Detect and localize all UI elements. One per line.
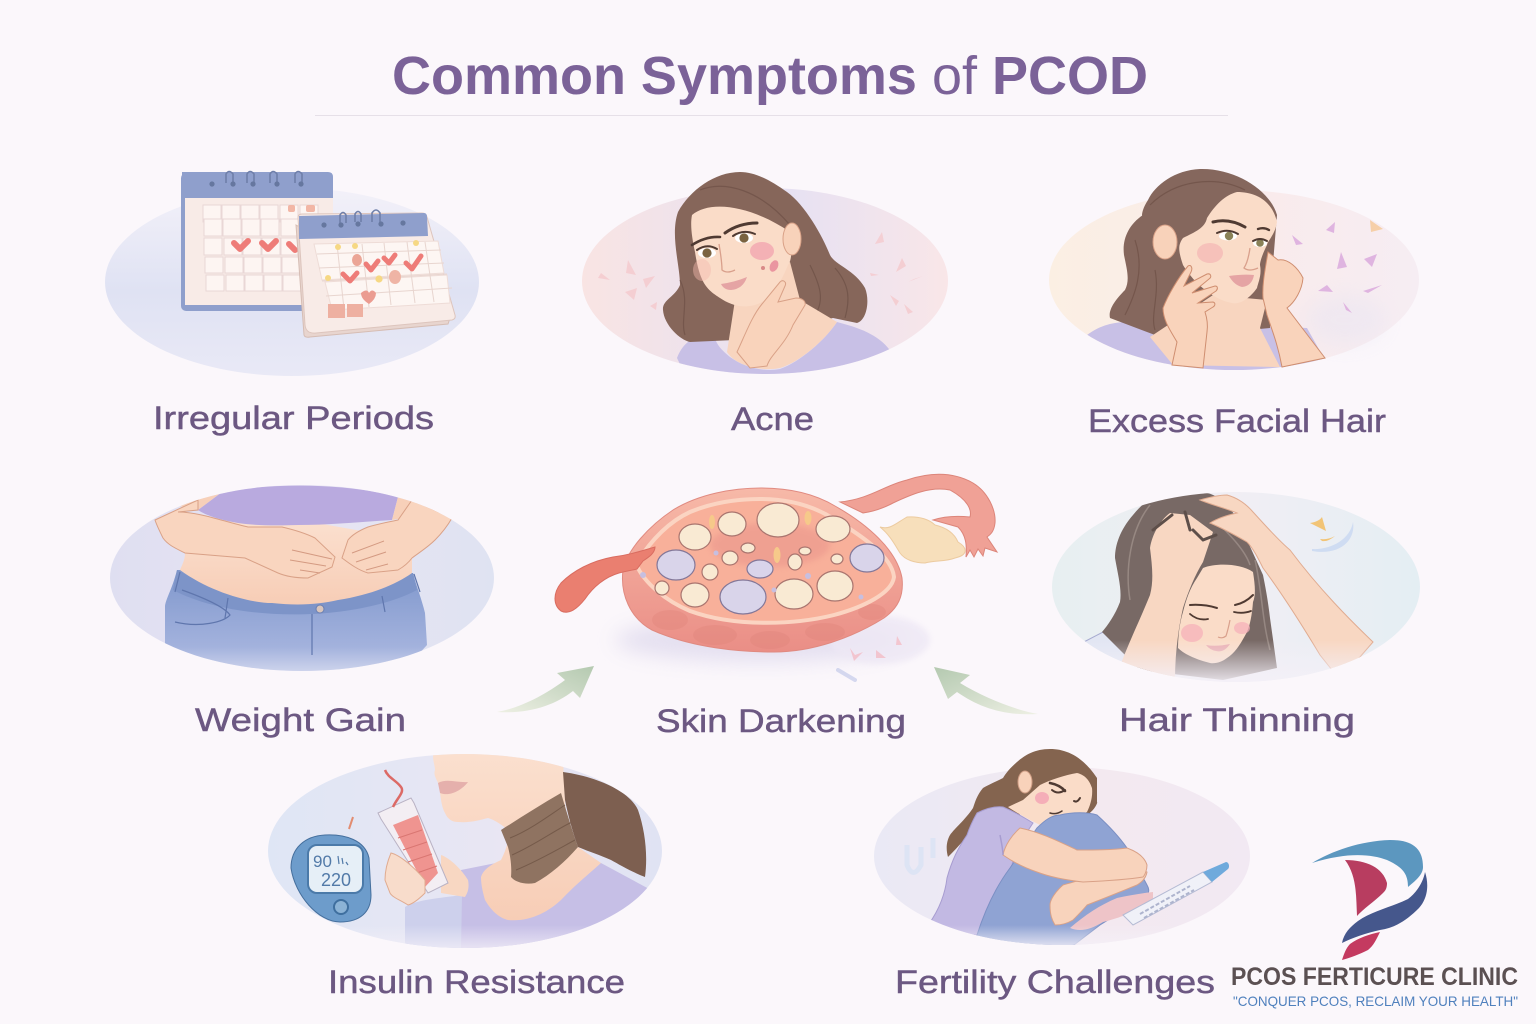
icon: test tube with hand xyxy=(378,770,469,905)
label: acne: Acne xyxy=(731,401,814,437)
icon: logo mark xyxy=(1312,840,1427,960)
icon: back calendar xyxy=(181,172,333,311)
icon: glucose meter: 90 xyxy=(313,852,332,871)
panel: acne xyxy=(582,172,948,385)
illustration: ovary with cysts xyxy=(555,474,997,680)
title: Common Symptoms of PCOD xyxy=(392,46,1148,106)
illustration: torso and jeans xyxy=(154,486,452,671)
icon: glucose meter xyxy=(291,817,371,922)
label: fertility challenges: Fertility Challenges xyxy=(895,964,1215,1000)
label: excess facial hair: Excess Facial Hair xyxy=(1088,403,1386,439)
illustration: woman touching hair xyxy=(1084,493,1374,680)
illustration: woman hugging knees xyxy=(931,749,1153,945)
label: weight gain: Weight Gain xyxy=(195,702,406,738)
panel: excess facial hair xyxy=(1049,169,1419,385)
panel: irregular periods xyxy=(105,172,479,376)
logo name: PCOS FERTICURE CLINIC xyxy=(1231,963,1518,991)
label: irregular periods: Irregular Periods xyxy=(153,400,434,436)
label: skin darkening: Skin Darkening xyxy=(656,703,906,739)
arrow: right xyxy=(934,667,1038,714)
label: insulin resistance: Insulin Resistance xyxy=(328,964,625,1000)
icon: glucose meter: 220 xyxy=(321,870,351,890)
icon: front calendar xyxy=(296,210,455,337)
logo: PCOS Ferticure Clinic xyxy=(1231,840,1518,1009)
panel: hair thinning xyxy=(1050,490,1430,690)
label: hair thinning: Hair Thinning xyxy=(1119,702,1355,738)
illustration: woman profile with darkened neck xyxy=(400,754,647,948)
panel: fertility challenges xyxy=(870,749,1260,950)
arrow: left xyxy=(497,666,594,712)
panel: insulin resistance xyxy=(268,754,662,948)
icon: pregnancy test xyxy=(1123,862,1229,925)
panel: weight gain xyxy=(110,480,494,680)
logo tagline: "CONQUER PCOS, RECLAIM YOUR HEALTH" xyxy=(1233,993,1518,1009)
